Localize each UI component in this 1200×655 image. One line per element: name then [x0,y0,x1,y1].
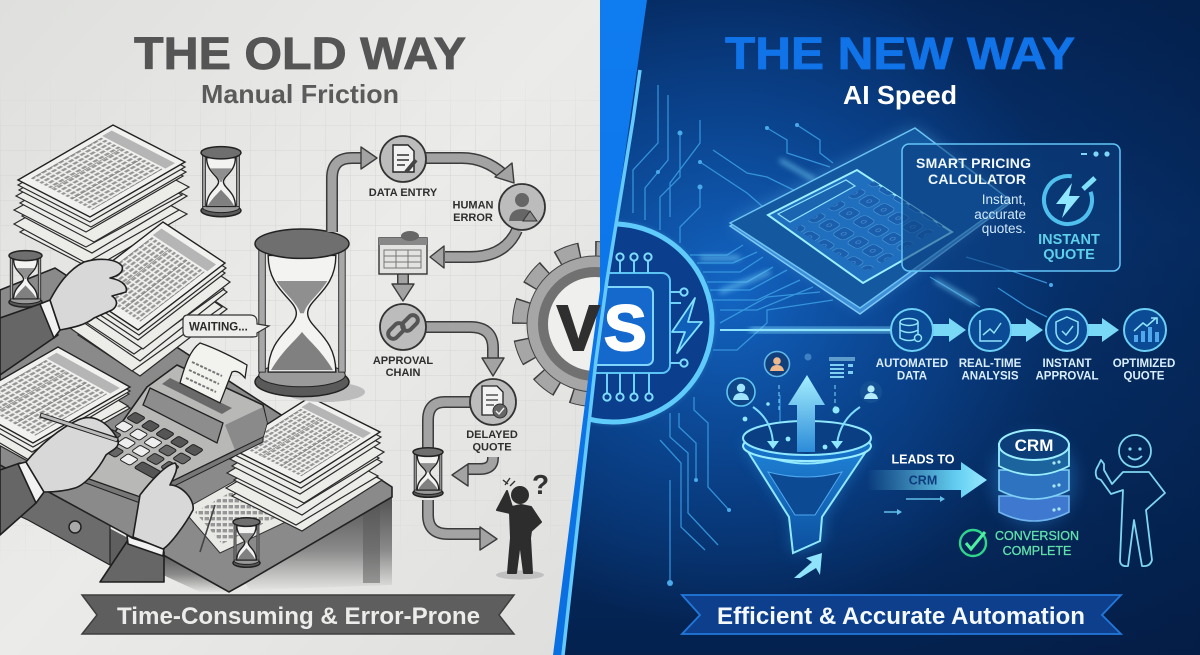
funnel glow [743,440,871,553]
banner: efficient and accurate automation: Efficient & Accurate Automation [717,603,1085,630]
banner: efficient and accurate automation [682,595,1121,634]
paper stack two [70,222,230,376]
badge: conversion complete: CONVERSION [995,529,1079,543]
icon: optimized quote [1124,309,1166,351]
paper stack one [14,125,189,269]
label: delayed quote: DELAYED [466,429,518,441]
funnel body [745,447,869,553]
up arrow [788,375,825,452]
chip [585,253,688,401]
panel heading: CALCULATOR [928,171,1026,187]
hand lower right with sleeve [100,463,193,582]
funnel rim [742,442,872,462]
vs label: S [604,292,647,364]
hourglass small three [233,518,260,567]
circuit traces [633,85,1047,583]
label: instant approval: INSTANT [1043,358,1091,370]
label: optimized quote: QUOTE [1124,370,1165,382]
subtitle: manual friction: Manual Friction [201,79,399,109]
icon: approval chain [380,304,426,350]
loose sheet and pencil [183,478,290,553]
panel: the old way [0,0,601,655]
hourglass small one [201,147,241,217]
flow arrows [332,147,517,550]
banner: time-consuming and error-prone: Time-Consuming & Error-Prone [117,603,480,630]
icon: instant approval [1046,309,1088,351]
vs label [557,292,647,364]
panel: smart pricing calculator [902,144,1120,271]
hand lower left with pencil [0,415,118,535]
arrow: leads to crm [867,452,987,515]
badge: conversion complete: COMPLETE [1003,544,1071,558]
callout: waiting: WAITING... [189,322,248,334]
panel description: accurate [974,207,1026,222]
icon: calendar [379,231,427,274]
hand upper with sleeve [0,259,126,375]
label: approval chain: APPROVAL [373,355,433,367]
icon: crm database: CRM [1015,436,1053,455]
label: automated data: AUTOMATED [876,358,948,370]
lead icons [727,352,882,406]
badge: conversion complete [960,529,1079,558]
title: the new way: THE NEW WAY [725,28,1075,79]
panel window controls [1081,151,1110,157]
icon: happy customer [1096,435,1165,566]
small launch arrow [794,553,822,578]
label: automated data: DATA [897,370,927,382]
process flow row [720,309,1175,382]
calculator with receipt [83,343,267,503]
receipt [180,343,247,403]
label: human error: HUMAN [453,200,494,212]
incoming curved arrows [753,407,860,444]
label: real-time analysis: REAL-TIME [959,358,1022,370]
trace nodes [656,123,1053,586]
tablet calculator [730,128,1010,314]
label: delayed quote: QUOTE [472,442,512,454]
callout: waiting [183,315,269,337]
panel: the new way [513,0,1200,655]
title: the old way: THE OLD WAY [134,28,466,79]
lightning icon [672,298,702,353]
paper stack three [0,347,130,464]
icon: data entry [380,136,426,182]
label: instant quote: QUOTE [1043,247,1095,263]
desk [0,268,392,592]
hourglass large [255,229,365,402]
vs circle with chip [590,220,716,426]
arrow: leads to crm: LEADS TO [892,452,955,466]
icon: real-time analysis [969,309,1011,351]
panel heading: SMART PRICING [916,155,1031,171]
icon: gear behind vs [520,249,670,399]
hourglass small two [9,251,42,307]
icon: instant quote bolt [1042,174,1097,226]
label: human error: ERROR [453,212,493,224]
subtitle: ai speed: AI Speed [843,80,957,110]
icon: delayed quote [470,379,516,425]
hourglass small four [413,448,443,497]
label: instant quote: INSTANT [1038,232,1100,248]
label: real-time analysis: ANALYSIS [961,370,1019,382]
paper stack four [226,397,384,531]
label: instant approval: APPROVAL [1035,370,1099,382]
icon: human error [499,184,545,230]
funnel with leads [727,352,882,578]
icon: confused person [496,469,549,580]
vs label: V [557,292,600,364]
icon: confused person: ? [532,469,549,500]
data doc icon [829,357,855,378]
label: optimized quote: OPTIMIZED [1113,358,1175,370]
panel description: quotes. [982,221,1026,236]
arrow: leads to crm: CRM [909,474,937,488]
divider highlight [563,70,640,655]
bright trace glows [700,160,975,303]
banner: time-consuming and error-prone [82,595,514,634]
flow arrows [930,318,1119,342]
label: approval chain: CHAIN [386,367,420,379]
icon: crm database [992,430,1076,526]
label: data entry: DATA ENTRY [369,187,438,199]
calculator keys [90,412,204,481]
panel description: Instant, [982,192,1026,207]
icon: automated data [891,309,933,351]
